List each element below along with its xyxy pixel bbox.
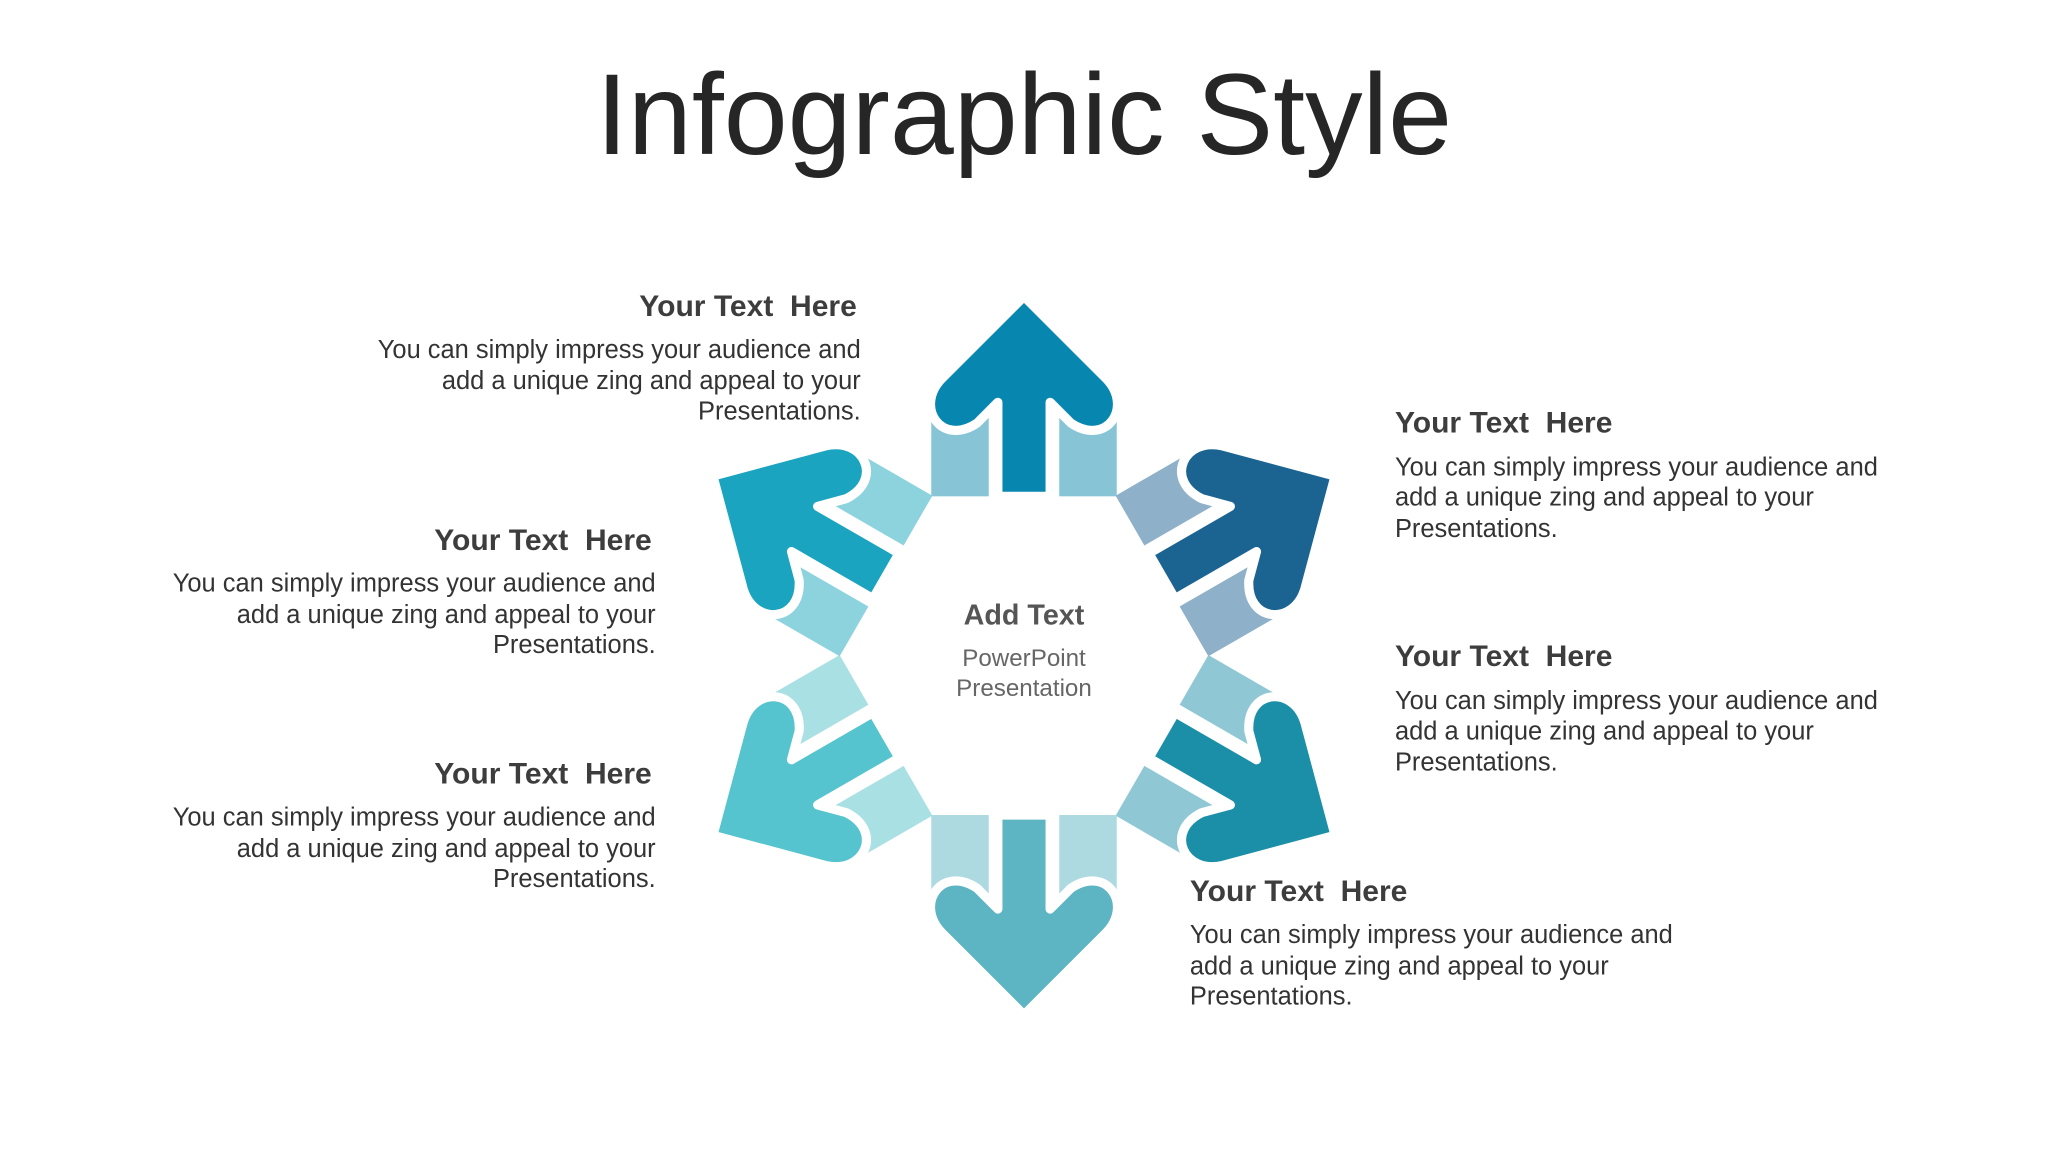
text block: top left: You can simply impress your audience and	[378, 336, 861, 364]
hexagon arrow diagram	[666, 296, 1382, 1015]
text block: middle left	[173, 524, 656, 659]
text block: lower left	[173, 758, 656, 893]
text block: upper right: add a unique zing and appeal to your	[1395, 483, 1814, 511]
text block: upper right: Presentations.	[1395, 515, 1558, 543]
arrow: upper right	[1115, 395, 1382, 657]
arrow: lower left	[666, 654, 933, 916]
text block: top left: Presentations.	[698, 397, 861, 425]
text block: bottom: You can simply impress your audience and	[1190, 921, 1673, 949]
text block: top left: Your Text Here	[639, 290, 857, 323]
text block: lower left: Your Text Here	[434, 758, 652, 791]
center text: Presentation	[956, 675, 1092, 702]
text block: middle left: Your Text Here	[434, 524, 652, 557]
text block: bottom	[1190, 875, 1673, 1010]
text block: middle right: Presentations.	[1395, 749, 1558, 777]
arrow: upper left	[666, 395, 933, 657]
text block: bottom: Your Text Here	[1190, 875, 1407, 908]
text block: middle left: add a unique zing and appeal to your	[237, 601, 656, 629]
text block: middle left: Presentations.	[493, 631, 656, 659]
text block: middle right: Your Text Here	[1395, 640, 1612, 673]
text block: bottom: Presentations.	[1190, 982, 1353, 1010]
text block: lower left: add a unique zing and appeal to your	[237, 835, 656, 863]
center text: PowerPoint	[962, 645, 1086, 672]
text block: middle left: You can simply impress your audience and	[173, 570, 656, 598]
center text: Add Text	[964, 599, 1085, 631]
text block: top left: add a unique zing and appeal to your	[442, 367, 861, 395]
text block: top left	[378, 290, 861, 425]
arrow: lower right	[1115, 654, 1382, 916]
text block: middle right	[1395, 640, 1878, 777]
text block: upper right	[1395, 406, 1878, 543]
text block: middle right: add a unique zing and appeal to your	[1395, 717, 1814, 745]
title: Infographic Style	[596, 51, 1452, 179]
center text	[956, 599, 1092, 702]
text block: bottom: add a unique zing and appeal to your	[1190, 952, 1609, 980]
text block: upper right: You can simply impress your audience and	[1395, 453, 1878, 481]
arrow: down	[931, 815, 1117, 1015]
arrow: up	[931, 296, 1117, 496]
text block: lower left: Presentations.	[493, 865, 656, 893]
text block: lower left: You can simply impress your audience and	[173, 803, 656, 831]
text block: upper right: Your Text Here	[1395, 406, 1612, 439]
text block: middle right: You can simply impress your audience and	[1395, 687, 1878, 715]
